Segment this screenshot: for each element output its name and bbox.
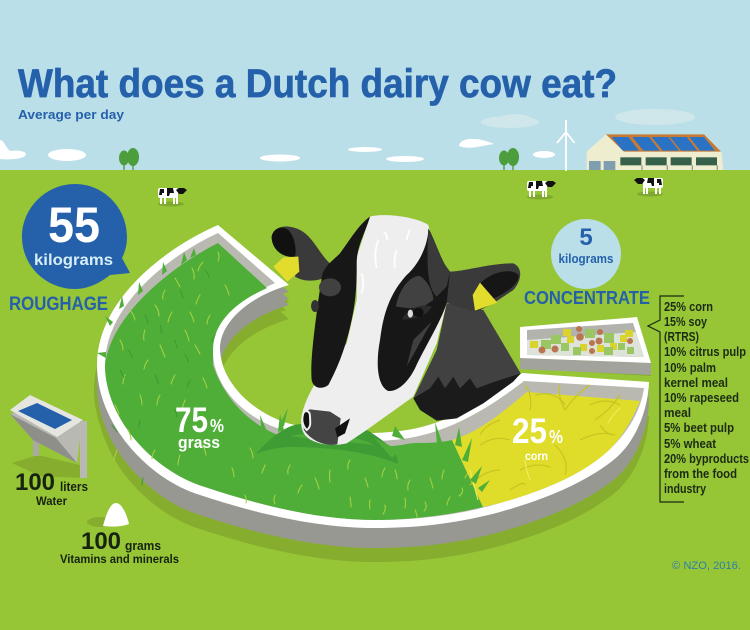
wind turbine bbox=[557, 120, 574, 171]
cow head bbox=[272, 215, 521, 445]
sky bbox=[0, 0, 750, 170]
left ear tag bbox=[273, 257, 299, 282]
water amount: Water bbox=[36, 494, 67, 508]
water amount: liters bbox=[60, 479, 88, 494]
corn share label: corn bbox=[525, 449, 548, 463]
face white bbox=[301, 215, 447, 445]
grass blades dark bbox=[112, 270, 215, 485]
concentrate label: CONCENTRATE bbox=[524, 288, 650, 308]
farm building bbox=[587, 134, 723, 170]
corn section bbox=[452, 392, 640, 507]
grass blades over back wall bbox=[97, 248, 196, 358]
concentrate bracket bbox=[648, 296, 684, 502]
right ear bbox=[437, 253, 520, 312]
concentrate bubble: 5 bbox=[579, 224, 593, 251]
feed cubes bbox=[530, 326, 634, 355]
concentrate composition list: (RTRS) bbox=[664, 330, 699, 344]
small cow right bbox=[634, 178, 663, 196]
eye bbox=[402, 305, 432, 319]
water amount bbox=[15, 469, 88, 508]
forehead hair bbox=[362, 230, 410, 293]
concentrate bubble: kilograms bbox=[558, 252, 614, 266]
concentrate composition list: 10% rapeseed bbox=[664, 391, 739, 405]
roughage speech bubble bbox=[22, 184, 130, 289]
feed trough bbox=[94, 225, 649, 562]
concentrate composition list: 5% beet pulp bbox=[664, 421, 734, 435]
concentrate composition list: meal bbox=[664, 406, 691, 420]
grass section bbox=[105, 243, 483, 520]
trough side wall bbox=[97, 232, 649, 548]
copyright: © NZO, 2016. bbox=[672, 560, 741, 572]
grass share label bbox=[175, 401, 224, 452]
water amount: 100 bbox=[15, 469, 55, 496]
left ear bbox=[272, 227, 330, 281]
muzzle bbox=[303, 409, 341, 445]
grass tuft at mouth bbox=[256, 424, 398, 464]
trees right bbox=[499, 148, 519, 170]
icon: water trough bbox=[10, 395, 87, 478]
corn straw bbox=[470, 385, 620, 490]
concentrate bubble bbox=[551, 219, 621, 289]
concentrate composition list bbox=[664, 300, 749, 496]
small cow left bbox=[158, 188, 187, 206]
trees left bbox=[119, 148, 139, 170]
grass share label: 75 bbox=[175, 401, 208, 440]
grass blades light bbox=[114, 252, 470, 517]
right ear tag bbox=[473, 283, 497, 311]
concentrate composition list: from the food bbox=[664, 467, 737, 481]
concentrate composition list: 25% corn bbox=[664, 300, 713, 314]
subtitle: Average per day bbox=[18, 107, 125, 122]
vitamins amount: 100 bbox=[81, 528, 121, 555]
clouds bbox=[0, 109, 695, 162]
concentrate composition list: kernel meal bbox=[664, 376, 728, 390]
left black patch bbox=[311, 217, 370, 388]
concentrate composition list: 15% soy bbox=[664, 315, 707, 329]
icon: mineral pile bbox=[87, 503, 129, 527]
right black patch bbox=[378, 228, 450, 391]
trough rim bbox=[97, 225, 649, 528]
inner wall bbox=[105, 233, 644, 520]
roughage speech bubble: 55 bbox=[48, 197, 100, 253]
roughage label: ROUGHAGE bbox=[9, 294, 108, 315]
concentrate composition list: 5% wheat bbox=[664, 437, 717, 451]
title: What does a Dutch dairy cow eat? bbox=[18, 62, 617, 106]
concentrate composition list: 10% palm bbox=[664, 361, 716, 375]
grass share label: % bbox=[210, 416, 224, 436]
corn share label: % bbox=[549, 427, 563, 447]
concentrate composition list: industry bbox=[664, 482, 706, 496]
grass share label: grass bbox=[178, 433, 220, 452]
neck bbox=[413, 303, 521, 421]
concentrate tray bbox=[520, 317, 651, 376]
vitamins amount: grams bbox=[125, 538, 161, 553]
small cow middle bbox=[527, 181, 556, 200]
meadow bbox=[0, 170, 750, 630]
corn share label: 25 bbox=[512, 412, 547, 451]
roughage speech bubble: kilograms bbox=[34, 252, 113, 269]
ground shadow bbox=[94, 242, 649, 562]
corn share label bbox=[512, 412, 563, 463]
vitamins amount bbox=[60, 528, 179, 566]
vitamins amount: Vitamins and minerals bbox=[60, 552, 179, 566]
